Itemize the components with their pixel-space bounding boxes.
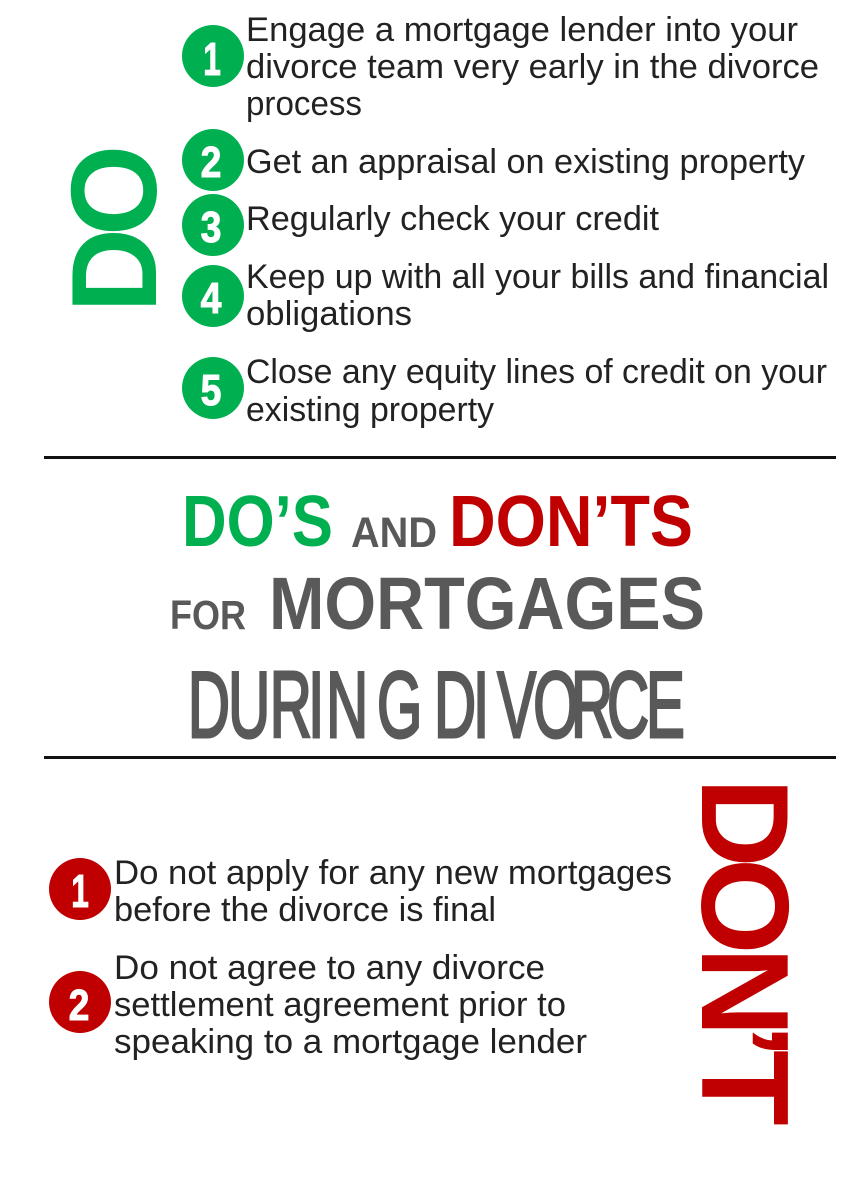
do item 5: Close any equity lines of credit on your [246, 353, 827, 391]
do item 1: Engage a mortgage lender into your [246, 11, 798, 49]
title [170, 482, 705, 757]
panel: don't list [49, 778, 813, 1126]
don't item 2: 2 [69, 980, 89, 1030]
do item 5: 5 [201, 365, 221, 415]
don't item 1: 1 [71, 866, 89, 917]
do item 3: 3 [201, 202, 221, 252]
don't item 2: Do not agree to any divorce [114, 949, 545, 987]
heading: DON'T: DON’T [675, 778, 813, 1126]
do item 1: divorce team very early in the divorce [246, 48, 819, 86]
do item 3 [182, 194, 660, 256]
don't item 2: settlement agreement prior to [114, 986, 566, 1024]
do item 4: Keep up with all your bills and financial [246, 258, 829, 296]
title line 1: AND [351, 509, 437, 557]
don't item 1: Do not apply for any new mortgages [114, 854, 672, 892]
do item 4: obligations [246, 295, 412, 333]
don't item 1 [49, 854, 672, 929]
don't item 1: before the divorce is final [114, 891, 496, 929]
panel: do list [47, 11, 829, 429]
do item 2: Get an appraisal on existing property [246, 143, 805, 181]
do item 2 [182, 129, 805, 191]
do item 4 [182, 258, 829, 333]
title line 2: MORTGAGES [269, 562, 705, 645]
do item 2: 2 [201, 137, 221, 187]
title line 1: DO’S [182, 482, 333, 562]
heading: DO: DO [47, 145, 183, 313]
do item 1: process [246, 85, 362, 123]
do item 3: Regularly check your credit [246, 200, 660, 238]
do item 4: 4 [201, 273, 222, 323]
do item 1: 1 [203, 34, 221, 85]
don't item 2: speaking to a mortgage lender [114, 1023, 587, 1061]
do item 5 [182, 353, 827, 429]
title line 2: FOR [170, 592, 246, 638]
do item 1 [182, 11, 819, 123]
title line 1 [182, 482, 693, 562]
title line 1: DON’TS [449, 482, 693, 562]
do item 5: existing property [246, 391, 494, 429]
don't item 2 [49, 949, 587, 1061]
title line 3: DURING DIVORCE [188, 652, 685, 757]
